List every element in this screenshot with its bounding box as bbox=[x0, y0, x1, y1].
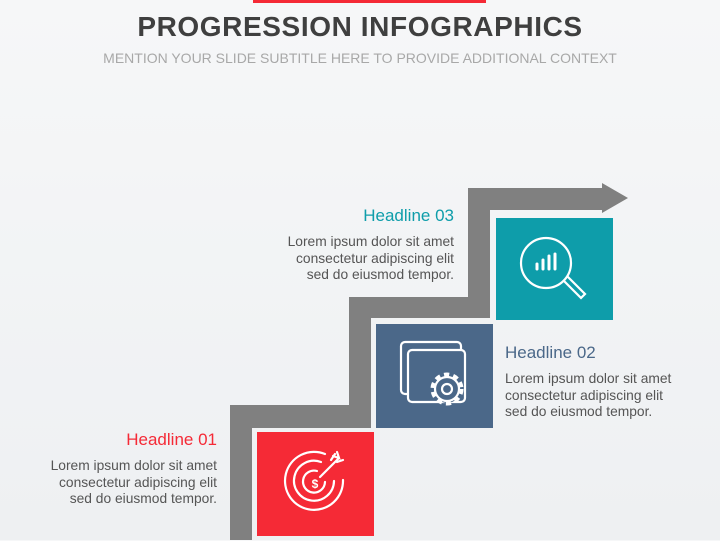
text block: headline 01: Headline 01 bbox=[126, 430, 217, 449]
text block: headline 01: sed do eiusmod tempor. bbox=[70, 491, 217, 506]
text block: headline 02: Headline 02 bbox=[505, 343, 596, 362]
text block: headline 02: sed do eiusmod tempor. bbox=[505, 404, 652, 419]
title: PROGRESSION INFOGRAPHICS bbox=[137, 11, 583, 42]
text block: headline 02: consectetur adipiscing elit bbox=[505, 388, 663, 402]
text block: headline 01: Lorem ipsum dolor sit amet bbox=[51, 458, 217, 473]
text block: headline 03 bbox=[288, 206, 454, 282]
text block: headline 03: Headline 03 bbox=[363, 206, 454, 225]
step 1 box: target icon: $ bbox=[312, 477, 319, 491]
text block: headline 03: Lorem ipsum dolor sit amet bbox=[288, 234, 454, 249]
text block: headline 01: consectetur adipiscing elit bbox=[59, 474, 217, 490]
step 3 box: magnifier chart icon bbox=[496, 218, 613, 320]
text block: headline 03: consectetur adipiscing elit bbox=[296, 250, 454, 266]
text block: headline 03: sed do eiusmod tempor. bbox=[307, 267, 454, 282]
text block: headline 02: Lorem ipsum dolor sit amet bbox=[505, 371, 671, 386]
step 2 box: windows gear icon bbox=[376, 324, 493, 428]
top accent bar bbox=[253, 0, 486, 3]
text block: headline 01 bbox=[51, 430, 217, 506]
step 1 box: target icon bbox=[257, 432, 374, 536]
text block: headline 02 bbox=[505, 343, 672, 419]
subtitle: MENTION YOUR SLIDE SUBTITLE HERE TO PROVIDE ADDITIONAL CONTEXT bbox=[103, 50, 617, 66]
